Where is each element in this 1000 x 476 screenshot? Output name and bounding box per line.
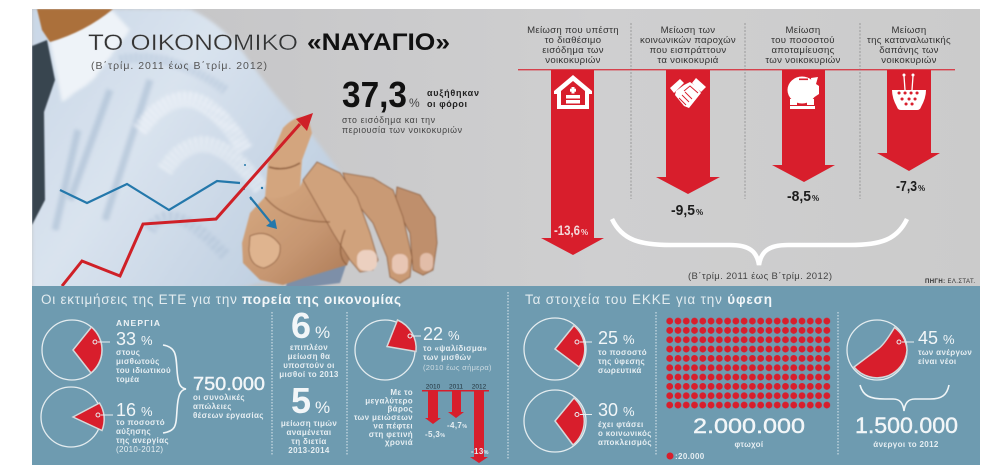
- thumb: [249, 233, 280, 268]
- brace: unemployment total: [163, 345, 186, 433]
- chart: wage decline by year: -13%: [471, 447, 489, 456]
- column: consumer spending: Μείωση: [892, 25, 926, 36]
- subtitle: (Β΄τρίμ. 2011 έως Β΄τρίμ. 2012): [91, 60, 267, 72]
- stat: 6% wage cuts: %: [315, 323, 330, 342]
- unemployment: 33% text: 33 %: [116, 329, 153, 349]
- stat: 750,000 job losses: απώλειες: [193, 402, 232, 411]
- shirt: [32, 9, 345, 290]
- social exclusion: 30% text: ο κοινωνικός: [598, 429, 652, 438]
- icon: shopping basket: [892, 74, 926, 110]
- social exclusion: 30% pie: [524, 390, 592, 452]
- text: heaviest burden: χρονιά: [385, 438, 413, 447]
- wage gap: 22% pie: [355, 320, 421, 380]
- text: heaviest burden: [354, 388, 413, 447]
- unemployment: 16% text: (2010-2012): [116, 445, 163, 454]
- cuff under hand: [285, 264, 346, 286]
- young unemployed: 45% text: [918, 328, 972, 366]
- ring finger: [343, 173, 412, 283]
- stat: 1,500,000 unemployed: 1.500.000: [855, 413, 958, 438]
- tie: [32, 40, 55, 225]
- text: heaviest burden: μεγαλύτερο: [365, 396, 413, 406]
- period label: (Β΄τρίμ. 2011 έως Β΄τρίμ. 2012): [688, 271, 832, 282]
- stat: 6% wage cuts: μείωση θα: [288, 352, 330, 361]
- wage gap: 22% text: 22 %: [423, 324, 460, 344]
- brace: grouping all declines: [612, 219, 907, 265]
- column: savings rate: -8,5: [787, 188, 811, 205]
- column: social benefits: τα νοικοκυριά: [657, 55, 719, 66]
- stat: 2,000,000 poor: [693, 415, 805, 449]
- unemployment: 16% text: το ποσοστό: [116, 418, 165, 427]
- social exclusion: 30% text: έχει φτάσει: [598, 420, 644, 429]
- stat: 6% wage cuts: 6: [291, 305, 311, 346]
- social exclusion: 30% text: αποκλεισμός: [598, 438, 652, 447]
- stat: 750,000 job losses: θέσεων εργασίας: [193, 411, 264, 420]
- baseline of decline chart: [518, 69, 955, 70]
- column: disposable income: [527, 25, 619, 255]
- index finger: [265, 117, 312, 198]
- column: disposable income: το διαθέσιμο: [545, 35, 601, 46]
- stat: 6% wage cuts: [279, 305, 339, 379]
- title emphasis: «ΝΑΥΑΓΙΟ»: [307, 29, 450, 56]
- chart: wage decline by year: [422, 384, 489, 463]
- column: savings rate: του ποσοστού: [771, 35, 835, 46]
- legend: one dot equals 20,000: :20.000: [675, 452, 705, 461]
- unemployment: 33% text: τομέα: [116, 375, 139, 384]
- text: heaviest burden: Με το: [390, 388, 413, 397]
- panel: top grey background: [32, 9, 980, 286]
- stat: 5% price cuts: μείωση τιμών: [281, 419, 337, 428]
- column: disposable income: νοικοκυριών: [545, 55, 601, 66]
- stat: 6% wage cuts: μισθοί το 2013: [279, 370, 339, 379]
- text: heaviest burden: βάρος: [387, 404, 413, 414]
- palm and thumb: [241, 180, 350, 286]
- stat: 1,500,000 unemployed: [855, 413, 958, 449]
- unemployment: 16% text: 16 %: [116, 400, 153, 420]
- unemployment: 33% text: μισθωτούς: [116, 357, 160, 366]
- chart: wage decline by year: 2010: [426, 384, 441, 390]
- callout: taxes 37.3%: οι φόροι: [427, 99, 467, 109]
- unemployment: 33% pie: [42, 320, 110, 380]
- stat: 5% price cuts: [281, 380, 337, 455]
- stat: 5% price cuts: αναμένεται: [286, 428, 332, 437]
- fingernails: [357, 250, 377, 271]
- column: consumer spending: νοικοκυριών: [881, 55, 937, 66]
- recession: 25% pie: [524, 318, 592, 380]
- unemployment: 16% text: αύξησης: [116, 427, 151, 436]
- pinky finger: [395, 187, 437, 275]
- stat: 6% wage cuts: επιπλέον: [290, 343, 328, 352]
- chart: wage decline by year: 2011: [449, 384, 463, 390]
- callout: taxes 37.3%: περιουσία των νοικοκυριών: [342, 125, 463, 135]
- young unemployed: 45% text: 45 %: [918, 328, 955, 348]
- unemployment: 16% text: [116, 400, 169, 454]
- chart: wage decline by year: -5,3%: [425, 430, 445, 439]
- column: disposable income: Μείωση που υπέστη: [527, 25, 619, 36]
- stat: 750,000 job losses: οι συνολικές: [193, 393, 245, 402]
- callout: taxes 37.3%: αυξήθηκαν: [427, 88, 479, 98]
- heading: EKKE data: Τα στοιχεία του ΕΚΚΕ για την ύφεση: [525, 292, 772, 307]
- neck: [37, 9, 113, 42]
- social exclusion: 30% text: 30 %: [598, 400, 635, 420]
- dot matrix: people in poverty: [666, 317, 831, 410]
- wage gap: 22% text: των μισθών: [423, 353, 472, 362]
- social exclusion: 30% text: [598, 400, 652, 447]
- column: disposable income: -13,6: [554, 223, 580, 238]
- column: consumer spending: δαπάνης των: [879, 45, 939, 56]
- icon: piggy bank: [788, 76, 819, 109]
- column: consumer spending: [867, 25, 951, 195]
- recession: 25% text: [598, 328, 647, 375]
- wage gap: 22% text: το «ψαλίδισμα»: [423, 344, 487, 353]
- blue chart line: [60, 164, 277, 229]
- young unemployed: 45% text: των ανέργων: [918, 348, 972, 357]
- stat: 5% price cuts: 2013-2014: [288, 446, 330, 455]
- unemployment: 33% text: ΑΝΕΡΓΙΑ: [116, 318, 160, 328]
- stat: 5% price cuts: 5: [291, 380, 311, 421]
- column: consumer spending: -7,3: [896, 178, 917, 195]
- text: heaviest burden: των μειώσεων: [354, 413, 413, 422]
- stat: 5% price cuts: τη διετία: [291, 437, 327, 446]
- callout: taxes 37.3%: %: [409, 96, 420, 110]
- column: social benefits: Μείωση των: [661, 25, 715, 36]
- chart: wage decline by year: 2012: [472, 384, 487, 390]
- callout: taxes 37.3%: στο εισόδημα και την: [342, 115, 436, 125]
- hand: [242, 117, 437, 285]
- column: savings rate: [765, 25, 841, 205]
- young unemployed: 45% text: είναι νέοι: [918, 357, 956, 366]
- stat: 2,000,000 poor: 2.000.000: [693, 415, 805, 438]
- brace: unemployed total: [860, 385, 949, 411]
- unemployment: 33% text: στους: [116, 348, 140, 357]
- red chart arrow: [62, 113, 313, 286]
- heading: ETE estimates: Οι εκτιμήσεις της ΕΤΕ για την πορεία της οικονομίας: [41, 292, 401, 307]
- text: heaviest burden: στη φετινή: [369, 430, 413, 439]
- column: savings rate: αποταμίευσης: [771, 45, 835, 56]
- icon: house: [554, 75, 592, 109]
- young unemployed: 45% pie: [847, 320, 914, 380]
- recession: 25% text: 25 %: [598, 328, 635, 348]
- column: savings rate: Μείωση: [786, 25, 820, 36]
- unemployment: 33% text: [116, 318, 171, 384]
- column: savings rate: %: [812, 194, 819, 203]
- stat: 2,000,000 poor: φτωχοί: [735, 440, 763, 449]
- wage gap: 22% text: [423, 324, 492, 372]
- panel: bottom blue background: [32, 286, 980, 465]
- column: disposable income: %: [581, 228, 588, 237]
- wage gap: 22% text: (2010 έως σήμερα): [423, 363, 492, 372]
- unemployment: 16% text: της ανεργίας: [116, 436, 169, 445]
- column: social benefits: που εισπράττουν: [649, 45, 727, 56]
- stat: 5% price cuts: %: [315, 398, 330, 417]
- recession: 25% text: της ύφεσης: [598, 357, 645, 366]
- icon: handshake: [670, 78, 706, 108]
- recession: 25% text: σωρευτικά: [598, 366, 642, 375]
- callout: taxes 37.3%: 37,3: [342, 74, 407, 115]
- photo: businessman pointing at a rising chart: [32, 9, 437, 290]
- column: social benefits: %: [696, 208, 703, 217]
- column: social benefits: [640, 25, 736, 219]
- column: disposable income: εισόδημα των: [542, 45, 604, 56]
- column: consumer spending: της καταναλωτικής: [867, 35, 951, 46]
- title: ΤΟ ΟΙΚΟΝΟΜΙΚΟ: [88, 30, 298, 55]
- unemployment: 33% text: του ιδιωτικού: [116, 366, 171, 375]
- stat: 750,000 job losses: [193, 374, 265, 420]
- column: social benefits: κοινωνικών παροχών: [640, 35, 736, 46]
- column: savings rate: των νοικοκυριών: [765, 55, 841, 66]
- stat: 750,000 job losses: 750.000: [193, 374, 265, 394]
- stat: 6% wage cuts: υποστούν οι: [283, 361, 335, 370]
- column: social benefits: -9,5: [671, 202, 695, 219]
- source: ΠΗΓΗ: ΕΛ.ΣΤΑΤ.: [925, 279, 975, 285]
- stat: 1,500,000 unemployed: άνεργοι το 2012: [873, 440, 939, 449]
- text: heaviest burden: να πέφτει: [373, 422, 413, 430]
- chart: wage decline by year: -4,7%: [447, 421, 467, 430]
- middle finger: [303, 162, 378, 272]
- unemployment: 16% pie: [41, 387, 113, 447]
- callout: taxes 37.3%: [342, 74, 479, 135]
- column: consumer spending: %: [918, 184, 925, 193]
- recession: 25% text: το ποσοστό: [598, 348, 647, 357]
